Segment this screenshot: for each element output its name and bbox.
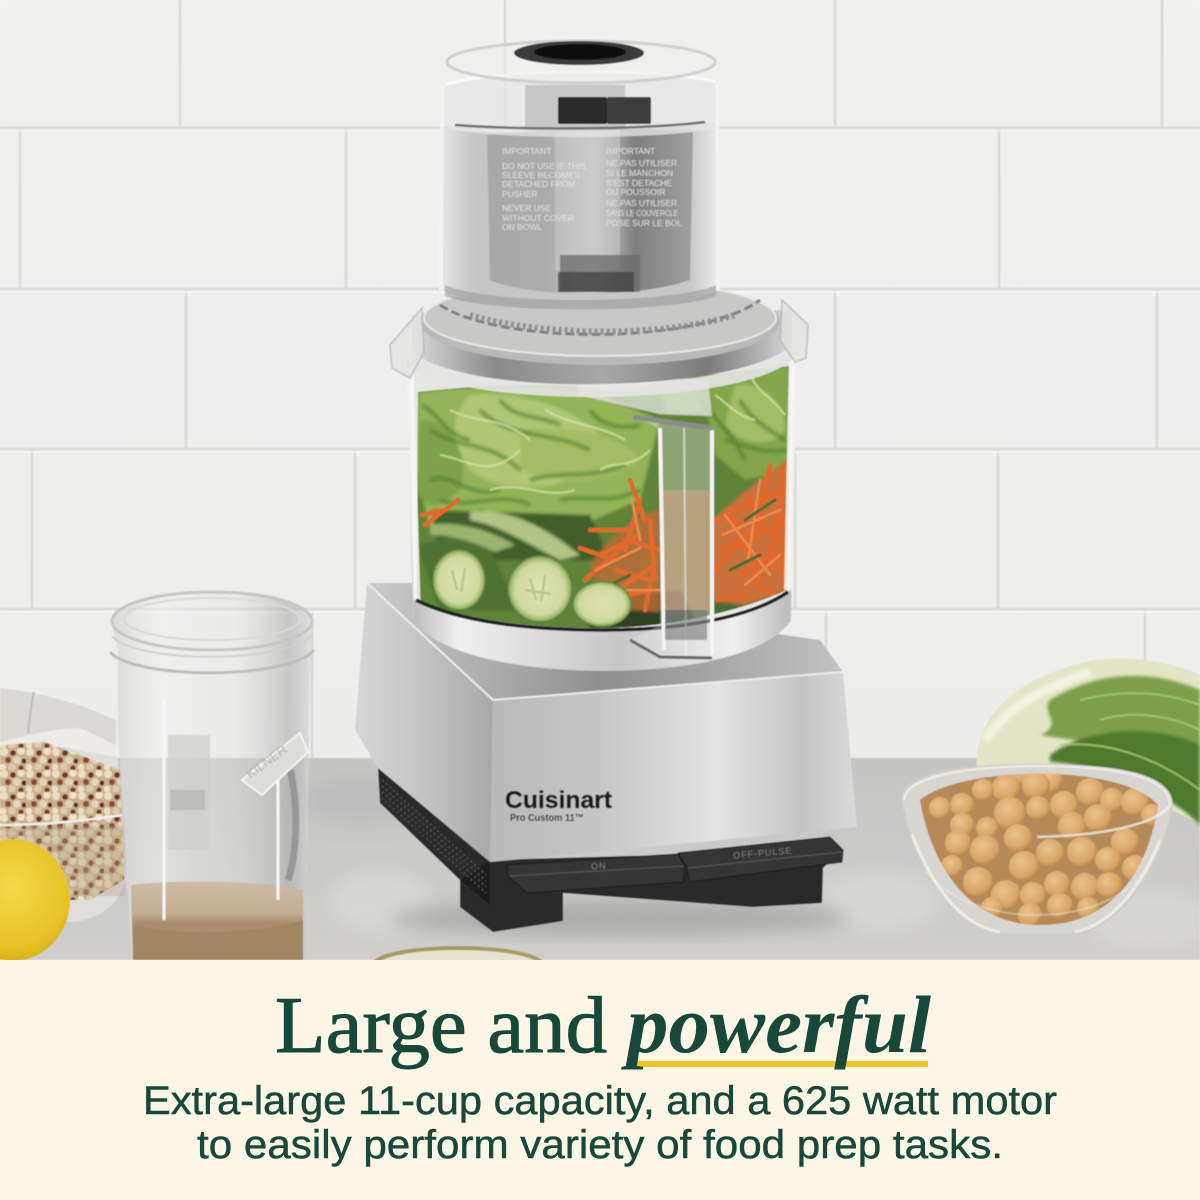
food processor [355, 41, 857, 932]
base shadow [390, 900, 850, 936]
steel housing [355, 583, 493, 862]
embossed instructions [502, 146, 682, 232]
counter [0, 758, 1200, 960]
heading [275, 982, 928, 1070]
embossed instructions: NE PAS UTILISER [606, 158, 677, 168]
description: Extra-large 11-cup capacity, and a 625 watt motor [143, 1079, 1057, 1123]
embossed instructions: SI LE MANCHON [606, 168, 673, 178]
food contents [410, 360, 795, 635]
lemon [0, 839, 70, 961]
embossed instructions: IMPORTANT [502, 146, 551, 156]
bowl lid [390, 279, 808, 397]
heading: Large and [275, 982, 607, 1070]
counter marbling [316, 784, 1198, 938]
embossed instructions: SANS LE COUVERCLE [606, 208, 678, 218]
description: to easily perform variety of food prep tasks. [197, 1123, 1003, 1167]
embossed instructions: ON BOWL [502, 222, 542, 232]
bowl base rim [414, 590, 790, 670]
romaine lettuce head [977, 659, 1200, 825]
quinoa bowl [0, 740, 130, 922]
chickpea bowl [902, 760, 1172, 934]
mason jar: KILNER [243, 742, 290, 781]
can lid [374, 946, 542, 960]
carrots seen through handle [660, 490, 710, 610]
heading emphasis: powerful [621, 979, 931, 1070]
embossed instructions: NEVER USE [502, 203, 551, 213]
control buttons: OFF-PULSE [733, 845, 793, 861]
embossed instructions: IMPORTANT [606, 146, 655, 156]
tube upper collar [446, 82, 704, 138]
embossed instructions: PUSHER [502, 189, 537, 199]
brand logo [505, 790, 612, 822]
handle [575, 372, 712, 663]
embossed instructions: WITHOUT COVER [502, 213, 574, 223]
embossed instructions: POSE SUR LE BOL [606, 218, 682, 228]
control buttons: ON [591, 861, 607, 871]
feed tube [441, 41, 718, 310]
pusher cap [514, 41, 644, 65]
caption panel [0, 960, 1200, 1200]
embossed instructions: DO NOT USE IF THIS [502, 161, 587, 171]
heading accent underline [636, 1061, 928, 1067]
work bowl [415, 364, 788, 630]
shredded carrots [422, 465, 790, 610]
embossed instructions: DU POUSSOIR [606, 187, 666, 197]
pusher latch [558, 97, 607, 124]
brand logo: Pro Custom 11™ [510, 813, 584, 824]
embossed instructions: NE PAS UTILISER [606, 198, 677, 208]
pusher rim [447, 41, 715, 83]
brand logo: Cuisinart [505, 787, 612, 814]
bowl glass edges [408, 352, 796, 670]
black motor base [378, 768, 843, 932]
carrot mass [712, 458, 790, 605]
control buttons [507, 837, 843, 893]
embossed instructions: SLEEVE BECOMES [502, 170, 580, 180]
embossed instructions: S'EST DETACHE [606, 178, 672, 188]
cloth napkin [0, 688, 116, 744]
tiled wall [0, 0, 1200, 765]
cucumber slices [432, 549, 486, 611]
description [143, 1079, 1057, 1167]
embossed instructions: DETACHED FROM [502, 179, 576, 189]
mason jar [110, 591, 314, 960]
